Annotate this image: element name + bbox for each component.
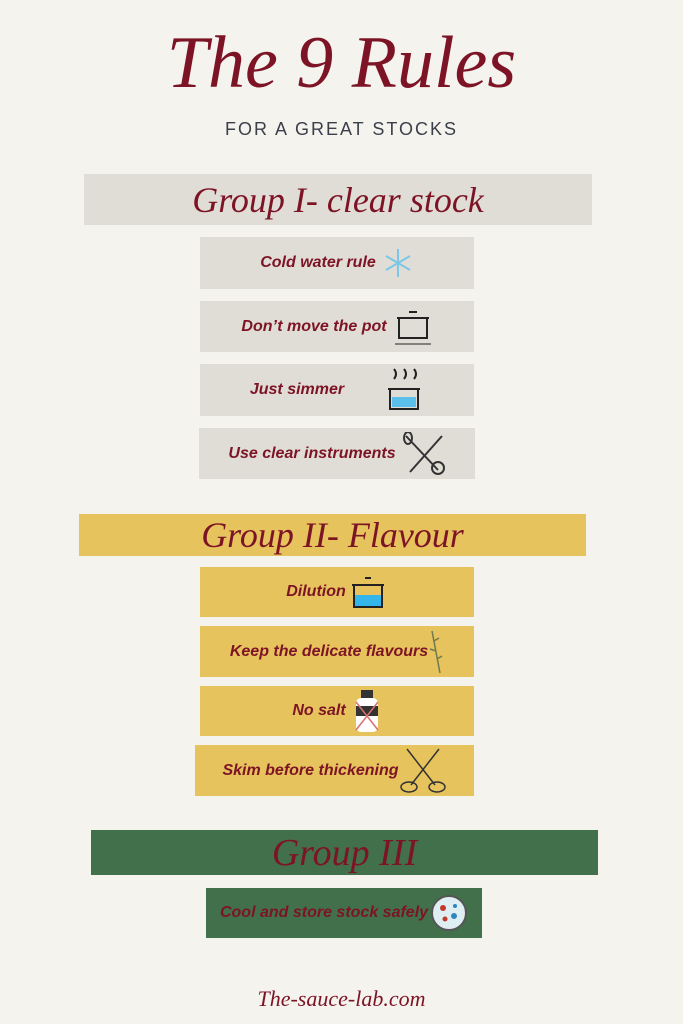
- box: dilution: [200, 567, 474, 617]
- heading: group II: [79, 514, 586, 556]
- heading: group III: [91, 830, 598, 875]
- box: just simmer: Just simmer: [250, 381, 344, 398]
- box: no salt: No salt: [292, 702, 346, 719]
- box: use clear instruments: Use clear instruments: [228, 444, 396, 462]
- box: cool and store stock safely: [206, 888, 482, 938]
- box: just simmer: [200, 364, 474, 416]
- heading: group I: Group I- clear stock: [192, 180, 484, 220]
- box: skim before thickening: [195, 745, 474, 796]
- box: dilution: Dilution: [286, 583, 346, 600]
- box: cold water rule: Cold water rule: [260, 254, 376, 271]
- box: keep the delicate flavours: Keep the delicate flavours: [230, 642, 428, 660]
- box: no salt: [200, 686, 474, 736]
- heading: group I: [84, 174, 592, 225]
- subtitle: FOR A GREAT STOCKS: [225, 119, 458, 139]
- box: skim before thickening: Skim before thickening: [222, 762, 399, 778]
- heading: group III: Group III: [272, 832, 417, 874]
- box: use clear instruments: [199, 428, 475, 479]
- heading: group II: Group II- Flavour: [201, 515, 464, 555]
- box: cool and store stock safely: Cool and store stock safely: [220, 904, 428, 921]
- box: don't move the pot: Don’t move the pot: [241, 318, 387, 334]
- box: keep the delicate flavours: [200, 626, 474, 677]
- box: cold water rule: [200, 237, 474, 289]
- box: don't move the pot: [200, 301, 474, 352]
- footer: The-sauce-lab.com: [257, 986, 426, 1011]
- title: The 9 Rules: [167, 22, 516, 104]
